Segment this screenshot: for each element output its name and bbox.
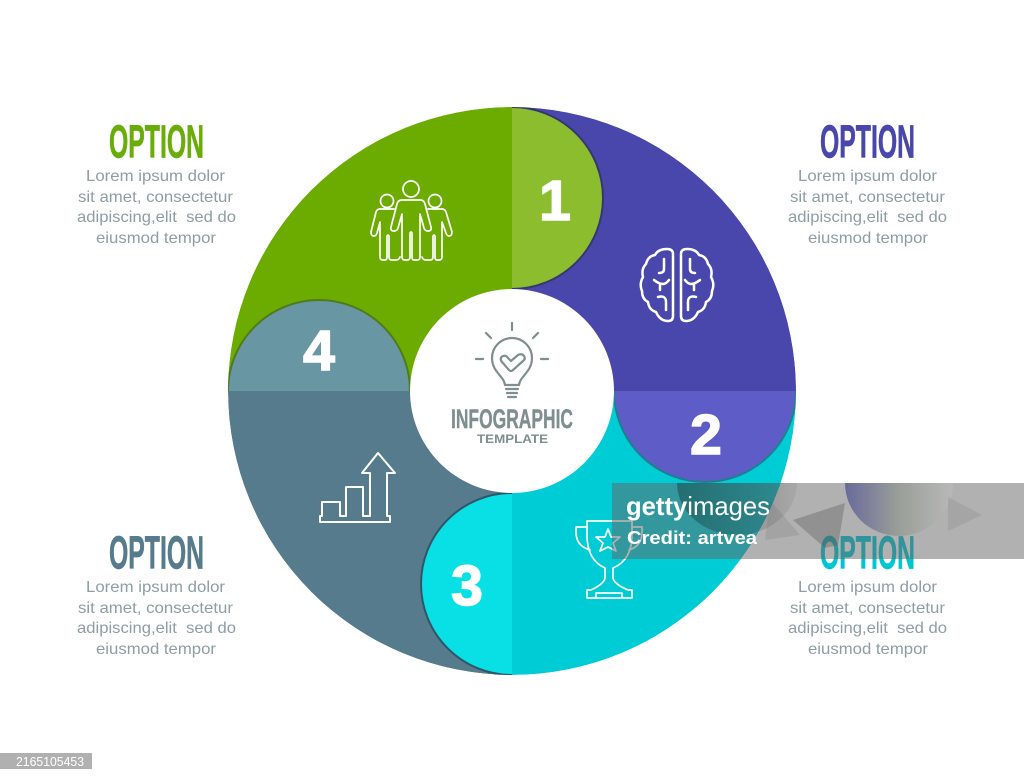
body text: Lorem ipsum dolor [798,168,938,185]
body text: sit amet, consectetur [78,600,234,617]
heading: OPTION [109,116,204,168]
text block: option 1 green [77,116,236,247]
body text: eiusmod tempor [808,230,929,247]
body text [77,579,236,658]
body text: adipiscing,elit sed do [77,209,236,226]
segment 1: green quadrant [228,107,512,391]
body text [788,168,947,247]
segment 2: purple quadrant [512,107,796,391]
center white circle [410,289,614,493]
body text: Lorem ipsum dolor [86,579,226,596]
circular diagram [228,107,796,675]
icon: rising bar chart with arrow [320,453,395,522]
center title: INFOGRAPHIC [451,404,573,434]
image id tag [0,753,92,769]
icon: trophy with star [576,521,642,598]
credit line: Credit: artvea [627,527,758,548]
body text: adipiscing,elit sed do [77,620,236,637]
body text: eiusmod tempor [96,641,217,658]
number 3: 3 [451,554,483,618]
watermark band [612,483,1024,559]
getty images wordmark: gettyimages [626,491,770,521]
body text: Lorem ipsum dolor [86,168,226,185]
center badge: lightbulb and title [451,323,573,446]
body text: adipiscing,elit sed do [788,209,947,226]
heading: OPTION [820,116,915,168]
body text: sit amet, consectetur [78,189,234,206]
text block: option 4 cyan [788,526,947,658]
segment 4: slate quadrant [228,391,512,675]
segment 3: cyan quadrant [512,391,796,675]
text block: option 3 slate [77,526,236,658]
body text: eiusmod tempor [808,641,929,658]
number 1: 1 [539,169,571,233]
tab 1 edge shadow [512,107,603,289]
body text: sit amet, consectetur [790,600,946,617]
body text: Lorem ipsum dolor [798,579,938,596]
icon: people group [371,181,452,260]
tab 2: light purple half disc [614,391,796,482]
tab 4: light slate half disc [228,300,410,391]
body text: eiusmod tempor [96,230,217,247]
tab 2 edge shadow [614,391,796,482]
image id tag: 2165105453 [16,755,84,769]
body text: sit amet, consectetur [790,189,946,206]
number 2: 2 [690,403,722,467]
body text: adipiscing,elit sed do [788,620,947,637]
text block: option 2 purple [788,116,947,247]
heading: OPTION [109,526,204,578]
icon: lightbulb with check [476,323,548,397]
heading: OPTION [820,526,915,578]
center subtitle: TEMPLATE [477,432,548,446]
tab 1: light green half disc [512,107,603,289]
tab 4 edge shadow [228,300,410,391]
number 4: 4 [303,319,335,383]
tab 3 edge shadow [421,493,512,675]
body text [77,168,236,247]
body text [788,579,947,658]
tab 3: bright cyan half disc [421,493,512,675]
icon: brain [641,249,713,321]
